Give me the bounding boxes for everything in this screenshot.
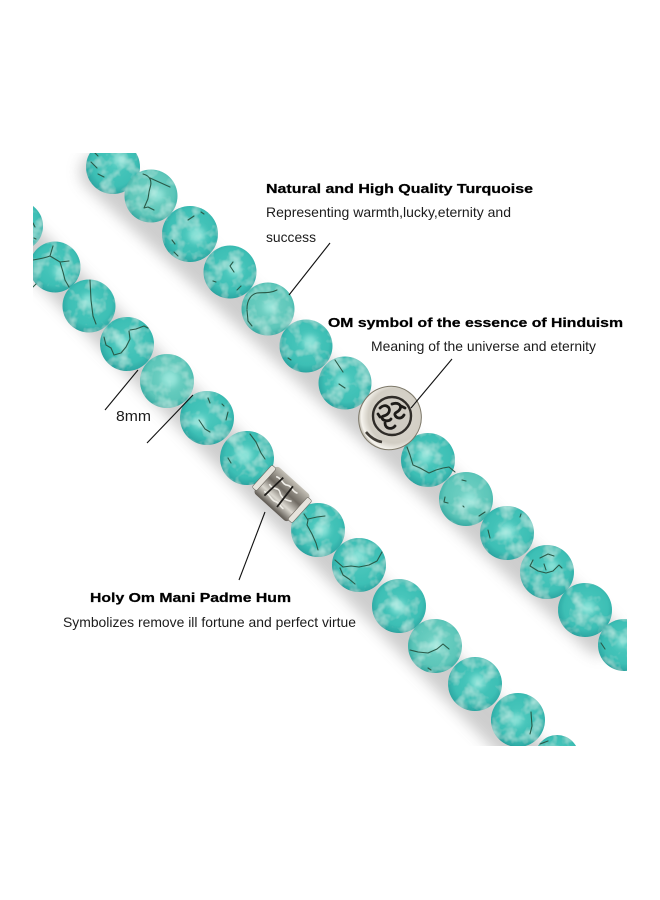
- description: OM symbol: Meaning of the universe and eternity: [371, 338, 596, 354]
- callout: Om Mani Padme Hum: [63, 512, 356, 630]
- heading: OM symbol: OM symbol of the essence of Hinduism: [328, 315, 623, 330]
- dimension line: upper: [105, 370, 138, 410]
- heading: Om Mani Padme Hum: Holy Om Mani Padme Hum: [90, 590, 291, 605]
- description: Om Mani Padme Hum: Symbolizes remove ill fortune and perfect virtue: [63, 614, 356, 630]
- leader line: barrel bead: [239, 512, 265, 580]
- photo of turquoise bead strands: [33, 153, 627, 746]
- heading: natural turquoise: Natural and High Quality Turquoise: [266, 181, 533, 196]
- leader line: turquoise bead: [289, 243, 330, 295]
- dimension line: lower: [147, 395, 193, 443]
- left bead strand: [33, 206, 576, 746]
- strand shadows: [18, 172, 600, 768]
- callout: OM symbol: [328, 315, 623, 408]
- size label: 8mm: [116, 408, 151, 425]
- callout: bead size: [105, 370, 193, 443]
- description: natural turquoise: [266, 204, 511, 245]
- cracks: left strand: [33, 223, 548, 744]
- right bead strand: [86, 140, 650, 671]
- callout: natural turquoise: [266, 181, 533, 295]
- silver OM bead: [358, 386, 422, 450]
- description: natural turquoise: Representing warmth,lucky,eternity and: [266, 204, 511, 220]
- silver barrel bead: [252, 465, 312, 523]
- infographic page: [33, 153, 627, 746]
- leader line: OM bead: [411, 359, 452, 408]
- cracks: right strand: [91, 148, 605, 649]
- description: natural turquoise: success: [266, 229, 316, 245]
